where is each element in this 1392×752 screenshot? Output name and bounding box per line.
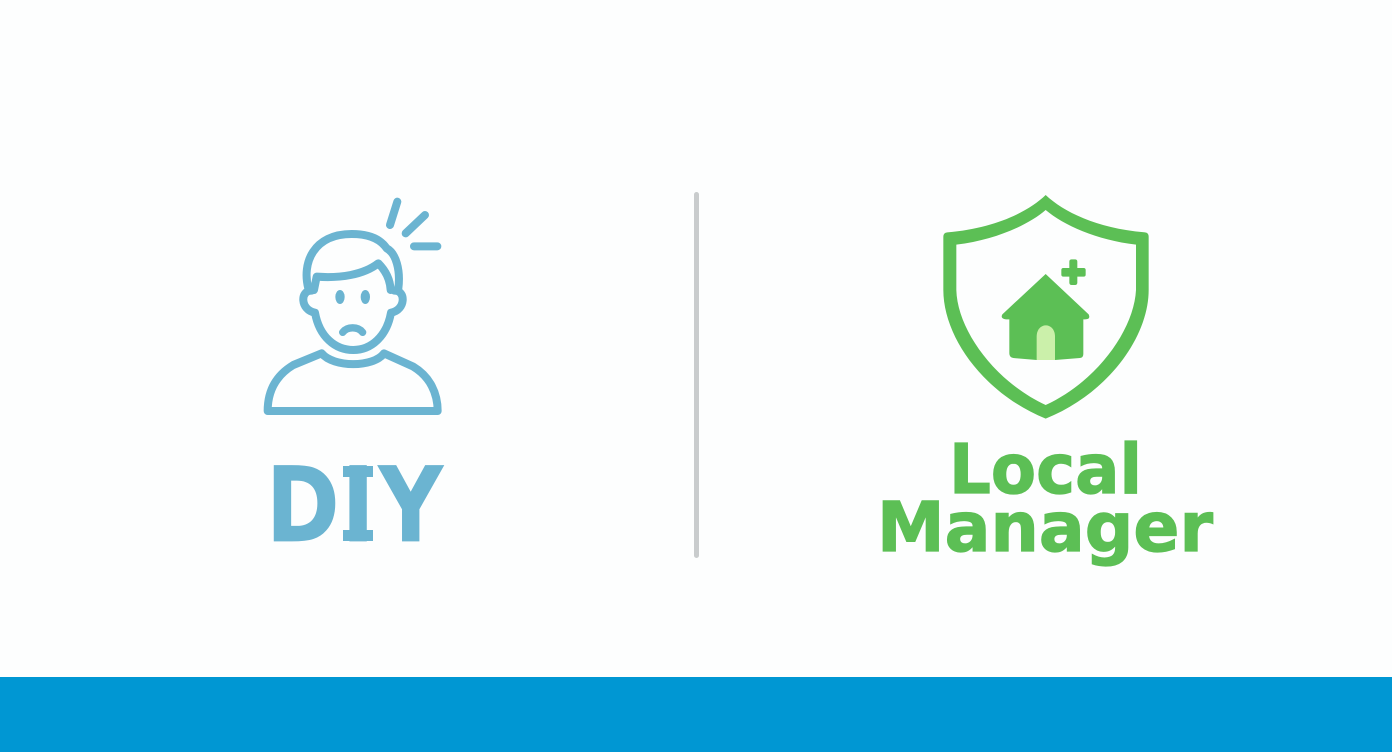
label: DIY: [266, 446, 444, 566]
bottom band: [0, 677, 1392, 752]
house door: [1037, 325, 1055, 360]
divider: [694, 192, 699, 558]
house: [1002, 274, 1089, 360]
icon: stressed person: [268, 202, 438, 411]
plus sign: [1061, 259, 1086, 285]
label: DIY: I: [342, 446, 375, 566]
shield outline: [943, 195, 1149, 419]
panel: DIY: [266, 202, 444, 566]
label: Local Manager: Manager: [877, 488, 1213, 568]
label: DIY: D: [266, 446, 340, 566]
icon: shield with house: [943, 195, 1149, 419]
label: DIY: Y: [378, 446, 444, 566]
label: Local Manager: Local: [949, 430, 1142, 510]
panel: Local Manager: [877, 195, 1213, 568]
